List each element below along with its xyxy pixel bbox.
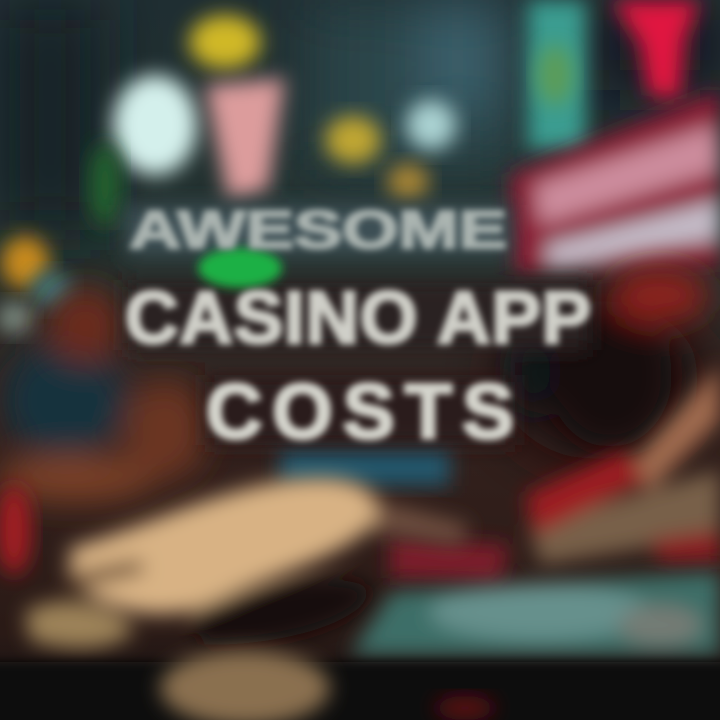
arm right: [390, 365, 720, 582]
icon: pale lamp left: [0, 302, 33, 334]
icon: red neon sign: [612, 0, 700, 100]
icon: pale lamp: [406, 100, 456, 150]
icon: orange lamp left: [1, 236, 49, 288]
title line 3: COSTS: [206, 367, 514, 455]
title line 1: AWESOME: [129, 200, 507, 260]
banner: red and white: [510, 90, 720, 275]
icon: white lamp: [113, 75, 197, 175]
people silhouettes: [0, 267, 710, 502]
icon: orange lamp: [387, 163, 429, 201]
red cloth left: [0, 485, 32, 575]
title: [125, 200, 591, 455]
tan object at bottom: [160, 650, 330, 720]
background glow shapes: [0, 0, 720, 460]
red glow at bottom: [435, 696, 495, 720]
icon: green chip: [198, 248, 282, 288]
game table: [350, 572, 720, 655]
icon: teal lamp left: [32, 272, 72, 308]
icon: yellow lamp small: [325, 116, 381, 164]
icon: teal column: [528, 0, 586, 150]
title line 2: CASINO APP: [125, 276, 591, 359]
tan central shape: [25, 478, 470, 648]
icon: yellow lamp: [189, 15, 261, 69]
icon: green plant: [89, 143, 121, 227]
teal band: [280, 448, 450, 486]
bottom dark strip: [0, 662, 720, 720]
icon: pink cup: [205, 78, 285, 200]
title backing: [125, 205, 590, 445]
